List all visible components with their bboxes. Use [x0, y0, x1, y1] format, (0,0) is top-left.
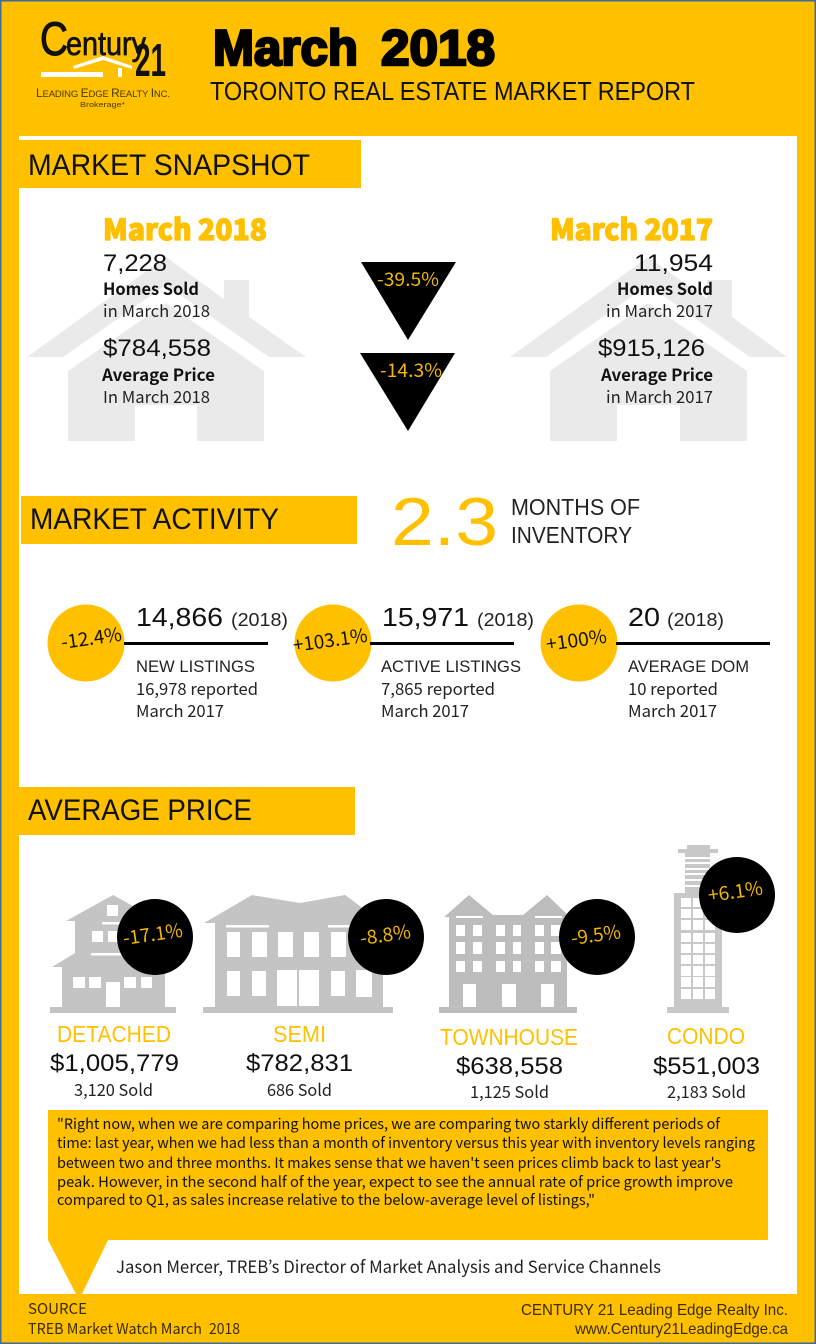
stat: average DOM: AVERAGE DOM	[628, 657, 749, 676]
stat: new listings: 14,866	[136, 602, 223, 632]
callout: months of inventory: MONTHS OF	[511, 494, 640, 520]
label: semi: 686 Sold	[267, 1077, 332, 1101]
stat: average DOM: 10 reported	[628, 676, 718, 700]
badge: townhouse -9.5%	[559, 899, 635, 975]
title: 2018	[381, 20, 495, 76]
label: detached: $1,005,779	[50, 1050, 179, 1077]
panel: March 2018 figures	[101, 207, 267, 408]
arrow: homes sold down -39.5%: -39.5%	[377, 265, 439, 292]
heading: market activity: MARKET ACTIVITY	[30, 503, 279, 536]
stat: active listings: 7,865 reported	[381, 676, 495, 700]
stat: active listings	[291, 602, 534, 722]
footer: source	[28, 1298, 240, 1339]
stat: average DOM: +100%	[544, 622, 608, 657]
label: semi: $782,831	[246, 1050, 353, 1077]
panel: March 2017 figures: 11,954	[634, 250, 713, 277]
label: townhouse: TOWNHOUSE	[440, 1024, 578, 1050]
icon: townhouse	[439, 895, 577, 1013]
panel: March 2018 figures: in March 2018	[103, 298, 210, 322]
stat: average DOM: March 2017	[628, 698, 717, 722]
stat: active listings: (2018)	[477, 610, 534, 630]
stat: average DOM: 20	[628, 602, 660, 632]
label: detached	[50, 1021, 179, 1101]
callout: quote bubble: time: last year, when we had less than a month of inventory versus this year with inventory levels ranging	[57, 1132, 755, 1153]
callout: quote bubble: peak. However, in the second half of the year, expect to see the annual rate of price growth improve	[57, 1171, 733, 1192]
icon: house 2017	[510, 257, 787, 441]
logo: Century 21 Leading Edge Realty	[36, 12, 170, 109]
panel: March 2018 figures: In March 2018	[103, 384, 210, 408]
label: condo	[653, 1023, 760, 1103]
label: townhouse	[440, 1024, 578, 1103]
label: condo: CONDO	[667, 1023, 745, 1049]
panel: March 2017 figures: $915,126	[598, 335, 705, 362]
icon: condo tower	[667, 845, 729, 1013]
stat: active listings: +103.1%	[291, 621, 369, 658]
panel: March 2017 figures: March 2017	[550, 207, 713, 249]
stat: new listings: -12.4%	[59, 620, 123, 655]
footer: company	[521, 1302, 788, 1338]
panel: March 2018 figures: $784,558	[103, 335, 211, 362]
footer: source: SOURCE	[28, 1298, 87, 1319]
icon: house 2018	[27, 257, 306, 441]
stat: average DOM: (2018)	[667, 610, 724, 630]
heading: market activity	[21, 496, 357, 544]
stat: new listings: 16,978 reported	[136, 676, 258, 700]
panel: March 2017 figures: Average Price	[600, 362, 713, 386]
badge: detached -17.1%	[117, 899, 193, 975]
heading: market snapshot	[19, 140, 361, 188]
badge: condo +6.1%: +6.1%	[706, 874, 764, 908]
heading: average price	[19, 787, 355, 835]
callout: quote bubble: between two and three months. It makes sense that we haven't seen prices climb back to last year's	[57, 1152, 721, 1173]
footer: source: TREB Market Watch March	[28, 1318, 202, 1339]
label: townhouse: 1,125 Sold	[470, 1079, 549, 1103]
logo: Century 21 Leading Edge Realty: LEADING EDGE REALTY INC.	[36, 86, 170, 100]
label: condo: $551,003	[653, 1053, 760, 1080]
footer: source: 2018	[209, 1318, 240, 1339]
footer: company: CENTURY 21 Leading Edge Realty Inc.	[521, 1302, 788, 1319]
title: March	[213, 20, 358, 76]
label: townhouse: $638,558	[456, 1053, 563, 1080]
arrow: average price down -14.3%: -14.3%	[380, 356, 442, 383]
callout: months of inventory: 2.3	[391, 484, 498, 560]
callout: quote bubble: "Right now, when we are comparing home prices, we are comparing two starkly different periods of	[57, 1113, 721, 1134]
panel: March 2017 figures: Homes Sold	[617, 276, 713, 300]
callout: months of inventory	[391, 484, 640, 560]
badge: detached -17.1%: -17.1%	[121, 916, 184, 951]
logo: Century 21 Leading Edge Realty: entury	[66, 25, 146, 62]
heading: average price: AVERAGE PRICE	[28, 794, 252, 827]
footer: company: www.Century21LeadingEdge.ca	[574, 1321, 788, 1338]
panel: March 2017 figures	[550, 207, 713, 408]
panel: March 2017 figures: in March 2017	[606, 384, 713, 408]
title	[213, 20, 495, 76]
icon: semi-detached	[203, 895, 393, 1013]
arrow: homes sold down -39.5%	[361, 262, 456, 340]
label: detached: 3,120 Sold	[74, 1077, 153, 1101]
stat: new listings: (2018)	[231, 610, 288, 630]
panel: March 2018 figures: Homes Sold	[103, 276, 199, 300]
stat: new listings: NEW LISTINGS	[136, 657, 255, 676]
label: semi: SEMI	[273, 1021, 326, 1047]
callout: months of inventory: INVENTORY	[511, 522, 632, 548]
panel: March 2017 figures: in March 2017	[606, 298, 713, 322]
heading: market snapshot: MARKET SNAPSHOT	[28, 149, 310, 182]
badge: townhouse -9.5%: -9.5%	[569, 917, 622, 951]
callout: quote bubble: compared to Q1, as sales increase relative to the below-average level of listings,"	[57, 1189, 595, 1210]
stat: average DOM	[540, 602, 770, 722]
logo: Century 21 Leading Edge Realty: C	[40, 12, 68, 65]
stat: active listings: ACTIVE LISTINGS	[381, 657, 521, 676]
stat: active listings: 15,971	[382, 602, 469, 632]
label: condo: 2,183 Sold	[667, 1079, 746, 1103]
logo: Century 21 Leading Edge Realty: 21	[135, 34, 166, 86]
badge: semi -8.8%: -8.8%	[358, 917, 412, 951]
callout: quote bubble	[48, 1110, 768, 1294]
icon: detached house	[50, 895, 176, 1013]
arrow: average price down -14.3%	[360, 353, 455, 431]
panel: March 2018 figures: 7,228	[103, 250, 167, 277]
panel: March 2018 figures: Average Price	[101, 362, 215, 386]
label: detached: DETACHED	[57, 1021, 171, 1047]
badge: semi -8.8%	[348, 899, 424, 975]
quote attribution: Jason Mercer, TREB’s Director of Market Analysis and Service Channels	[116, 1253, 661, 1278]
subtitle: TORONTO REAL ESTATE MARKET REPORT	[210, 76, 695, 106]
panel: March 2018 figures: March 2018	[103, 207, 267, 249]
label: semi	[246, 1021, 353, 1101]
logo: Century 21 Leading Edge Realty: Brokerage*	[80, 100, 125, 109]
stat: new listings: March 2017	[136, 698, 224, 722]
badge: condo +6.1%	[699, 857, 775, 933]
stat: active listings: March 2017	[381, 698, 469, 722]
stat: new listings	[48, 602, 288, 722]
